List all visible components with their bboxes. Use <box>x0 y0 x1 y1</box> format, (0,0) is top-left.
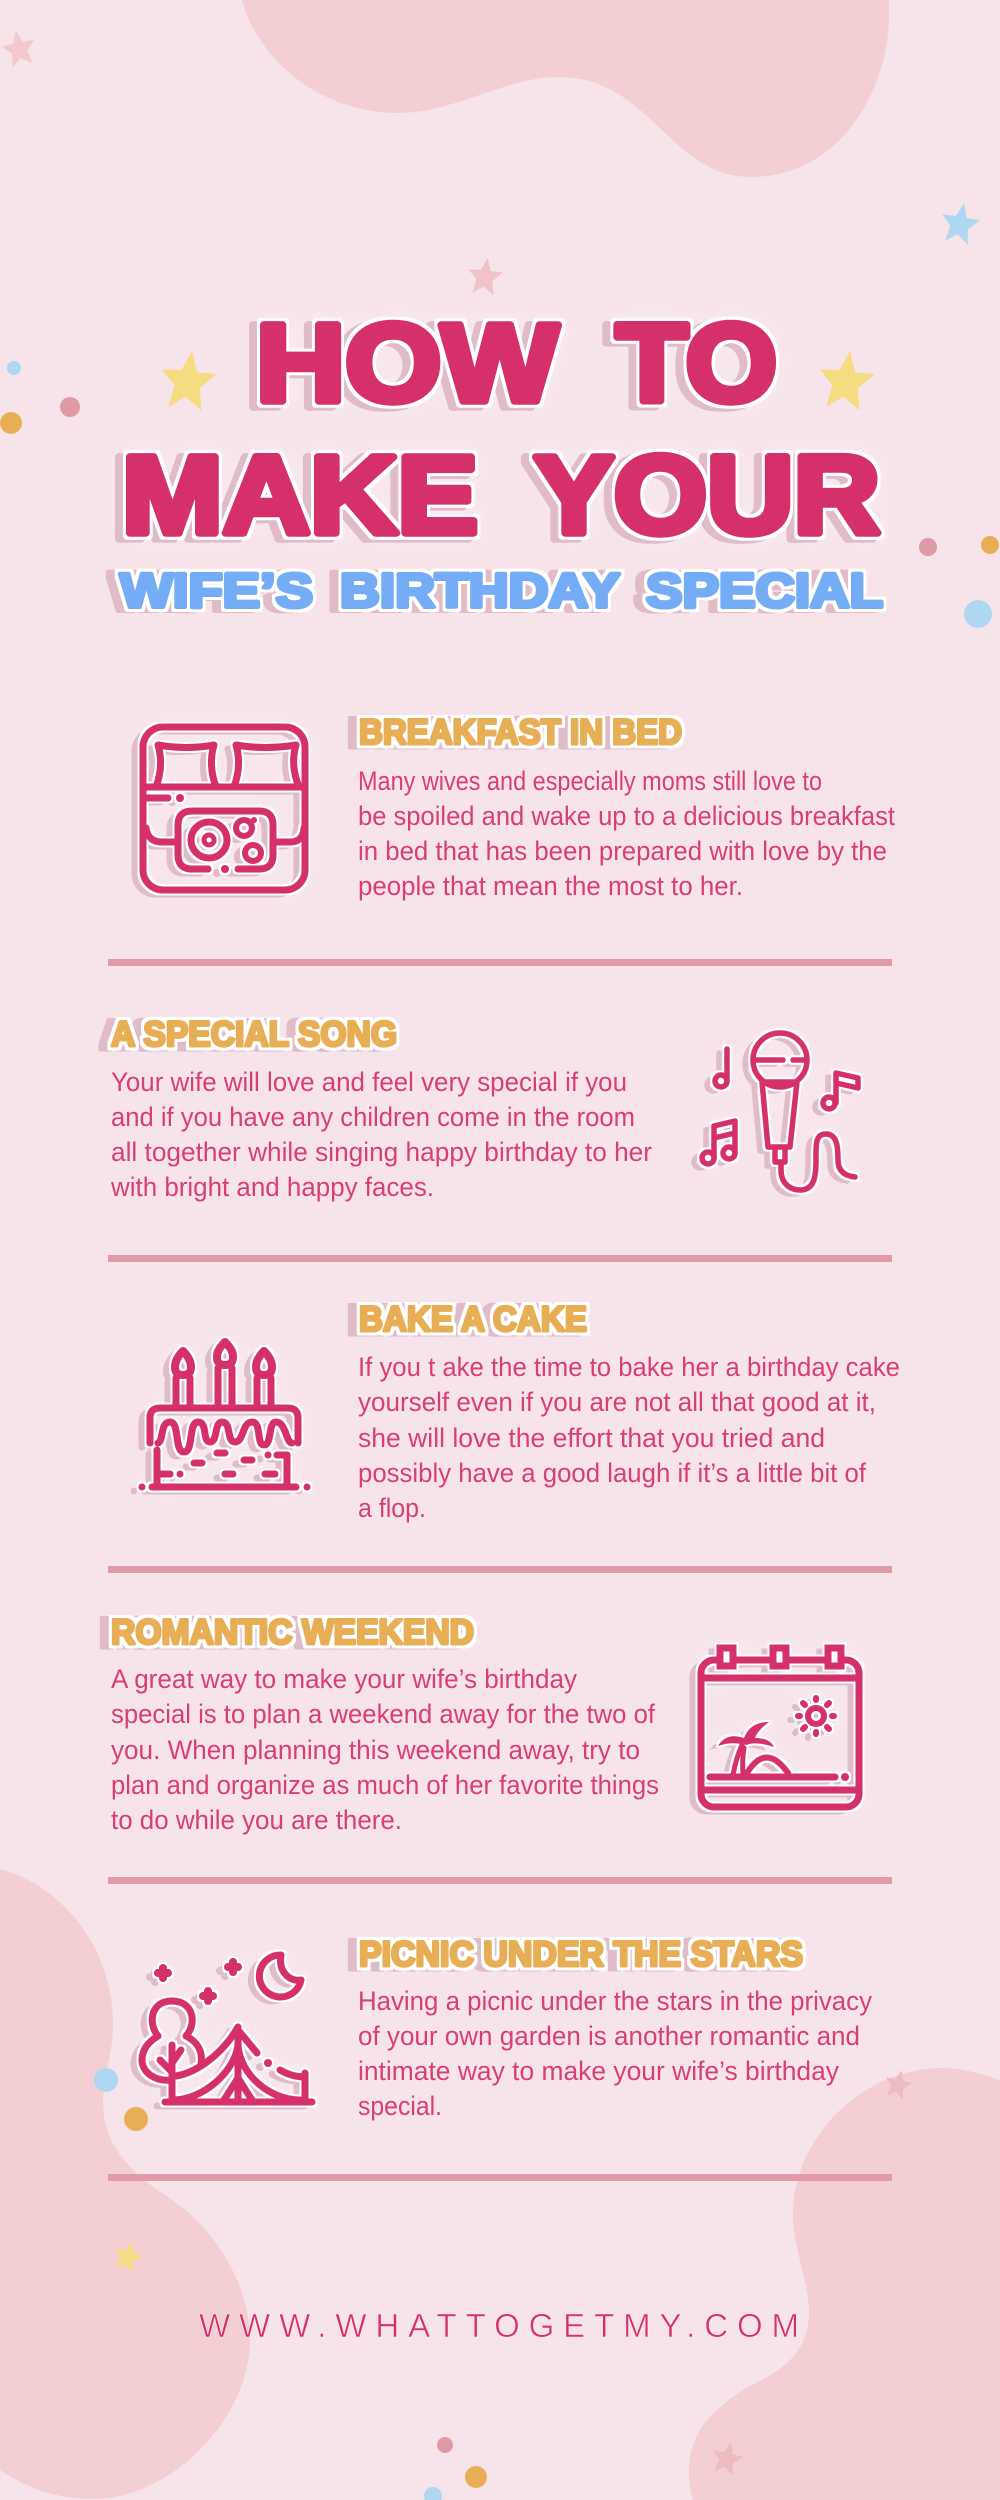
icon: calendar with beach <box>701 1648 859 1807</box>
text: romantic weekend body: special is to plan a weekend away for the two of <box>111 1699 656 1729</box>
title: how to make your: HOW <box>256 302 558 425</box>
text: a special song body: and if you have any children come in the room <box>111 1102 635 1132</box>
icon: microphone and music notes <box>702 1033 858 1190</box>
text: bake a cake body: a flop. <box>358 1493 426 1523</box>
heading: breakfast in bed: BREAKFAST IN BED <box>359 713 682 752</box>
text: romantic weekend body <box>111 1664 659 1835</box>
text: romantic weekend body: plan and organize as much of her favorite things <box>111 1770 659 1800</box>
text: bake a cake body: she will love the effort that you tried and <box>358 1423 825 1453</box>
subtitle: wife's birthday special: BIRTHDAY <box>340 565 620 618</box>
blob: bottom left <box>0 1869 250 2499</box>
text: romantic weekend body: A great way to make your wife’s birthday <box>111 1664 578 1694</box>
star: pink bottom right <box>881 2067 915 2101</box>
panel: a special song <box>110 1015 858 1202</box>
text: breakfast in bed body: Many wives and especially moms still love to <box>358 766 822 796</box>
star: top centre <box>465 255 505 297</box>
title: how to make your <box>122 302 880 557</box>
star: blue top right <box>937 199 983 247</box>
star: yellow left <box>157 347 219 413</box>
panel: picnic under the stars <box>142 1935 873 2121</box>
star: yellow right <box>815 347 877 413</box>
heading: bake a cake: BAKE A CAKE <box>359 1300 587 1339</box>
title: how to make your: MAKE <box>122 434 478 557</box>
icon: birthday cake <box>138 1342 310 1490</box>
subtitle: wife's birthday special: WIFE’S <box>120 565 313 618</box>
text: a special song body: all together while singing happy birthday to her <box>111 1137 652 1167</box>
text: bake a cake body: yourself even if you are not all that good at it, <box>358 1387 876 1417</box>
panel: bake a cake <box>138 1300 900 1523</box>
text: bake a cake body: If you t ake the time to bake her a birthday cake <box>358 1352 900 1382</box>
text: bake a cake body <box>358 1352 900 1523</box>
heading: romantic weekend: ROMANTIC WEEKEND <box>111 1613 474 1652</box>
subtitle: wife's birthday special: SPECIAL <box>646 565 883 618</box>
text: romantic weekend body: you. When planning this weekend away, try to <box>111 1735 640 1765</box>
icon: tent, tree, moon and stars <box>142 1955 312 2102</box>
text: a special song body <box>110 1067 652 1202</box>
blob: bottom right <box>689 2068 1000 2500</box>
star: top left <box>0 27 39 69</box>
text: breakfast in bed body: people that mean the most to her. <box>358 871 743 901</box>
text: a special song body: Your wife will love and feel very special if you <box>111 1067 627 1097</box>
text: romantic weekend body: to do while you are there. <box>111 1805 402 1835</box>
star: yellow bottom left <box>110 2237 146 2275</box>
text: bake a cake body: possibly have a good laugh if it’s a little bit of <box>358 1458 867 1488</box>
text: picnic body: intimate way to make your wife’s birthday <box>358 2056 840 2086</box>
heading: picnic under the stars: PICNIC UNDER THE STARS <box>359 1935 803 1974</box>
subtitle: wife's birthday special <box>120 565 883 618</box>
title: how to make your: TO <box>616 302 777 425</box>
panel: romantic weekend <box>111 1613 859 1835</box>
text: picnic body <box>358 1986 873 2121</box>
blob: top <box>242 0 889 177</box>
text: a special song body: with bright and happy faces. <box>110 1172 434 1202</box>
title: how to make your: YOUR <box>534 434 880 557</box>
heading: a special song: A SPECIAL SONG <box>111 1015 397 1054</box>
text: breakfast in bed body: be spoiled and wake up to a delicious breakfast <box>358 801 896 831</box>
text: picnic body: special. <box>358 2091 442 2121</box>
text: picnic body: Having a picnic under the stars in the privacy <box>358 1986 873 2016</box>
text: breakfast in bed body: in bed that has been prepared with love by the <box>358 836 887 866</box>
star: pink bottom <box>708 2438 746 2478</box>
text: picnic body: of your own garden is another romantic and <box>358 2021 860 2051</box>
footer: website url: WWW.WHATTOGETMY.COM <box>199 2307 799 2344</box>
icon: bed with breakfast tray <box>143 727 305 890</box>
panel: breakfast in bed <box>143 713 896 901</box>
text: breakfast in bed body <box>358 766 896 901</box>
